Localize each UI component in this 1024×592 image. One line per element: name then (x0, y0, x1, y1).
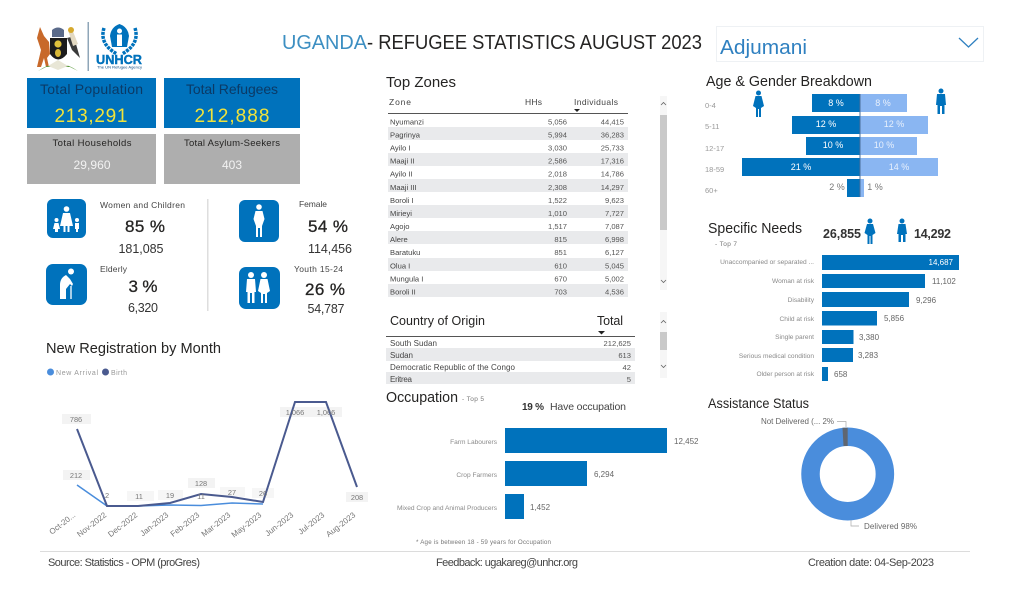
chart: population pyramid: 12 % (884, 119, 904, 129)
line chart: new registration by month: 1,066 (317, 408, 335, 417)
table: country of origin: 42 (623, 363, 631, 372)
line chart: new registration by month: 11 (135, 492, 143, 501)
callout: have occupation: Have occupation (550, 401, 626, 413)
bar chart: specific needs: 14,687 (929, 258, 954, 267)
table: country of origin: Eritrea (390, 375, 413, 384)
table: top zones: Agojo (390, 222, 409, 231)
donut chart: assistance status: Not Delivered (... 2% (761, 417, 834, 426)
stat: Female: 54 % (308, 217, 348, 236)
heading: New Registration by Month: New Registration by Month (46, 340, 221, 357)
donut chart: assistance status: Delivered 98% (864, 522, 917, 531)
card: Total Households (27, 134, 156, 184)
stat: Elderly: 6,320 (128, 301, 158, 315)
divider (207, 199, 208, 311)
table: top zones: 703 (554, 288, 567, 296)
table: top zones: 14,786 (601, 170, 624, 178)
table: top zones: 815 (554, 235, 567, 244)
heading: Specific Needs: - Top 7 (715, 241, 737, 248)
table: top zones: HHs (525, 97, 542, 107)
bar chart: specific needs: Older person at risk (756, 371, 815, 378)
line chart: new registration by month: 212 (70, 471, 82, 480)
stat: Women and Children: 181,085 (118, 242, 164, 256)
bar chart: occupation: Crop Farmers (456, 472, 498, 479)
card: Total Households: Total Households (52, 138, 132, 149)
bar chart: specific needs: 3,380 (859, 333, 880, 342)
table: top zones: 14,297 (601, 183, 624, 192)
donut chart: assistance status (761, 417, 917, 531)
title: - REFUGEE STATISTICS AUGUST 2023 (367, 31, 702, 54)
card: Total Population (27, 78, 156, 128)
chart: population pyramid: 1 % (867, 182, 883, 192)
chart: population pyramid: 60+ (705, 186, 718, 195)
table: top zones: 7,087 (605, 222, 624, 231)
bar chart: occupation: 12,452 (674, 437, 699, 446)
card: Total Households: 29,960 (74, 158, 111, 172)
bar chart: specific needs: Disability (788, 297, 815, 304)
table: top zones: 25,733 (601, 144, 624, 152)
line chart: new registration by month: 27 (228, 488, 236, 497)
line chart: new registration by month: Jul-2023 (297, 510, 327, 536)
title: UGANDA (282, 31, 367, 54)
card: Total Asylum-Seekers: Total Asylum-Seekers (184, 138, 280, 149)
table: country of origin: South Sudan (390, 339, 437, 348)
chart: population pyramid: 21 % (791, 162, 811, 172)
table: top zones: 6,127 (605, 248, 624, 257)
bar chart: specific needs: 658 (834, 370, 848, 379)
stat: Youth 15-24 (239, 264, 345, 316)
table: top zones: Pagrinya (390, 130, 421, 140)
table: top zones: 5,002 (605, 274, 624, 284)
chart: population pyramid: 14 % (889, 162, 909, 172)
footer: source: Source: Statistics - OPM (proGres) (48, 557, 200, 569)
footer: creation date: Creation date: 04-Sep-2023 (808, 557, 934, 569)
table: country of origin: Sudan (390, 351, 413, 360)
heading: Specific Needs (708, 220, 802, 248)
scrollbar: top zones (660, 96, 667, 290)
table: top zones: Mirieyi (390, 209, 412, 218)
stat: specific needs by gender (823, 218, 951, 244)
logo: UNHCR: UNHCR (96, 53, 142, 67)
footer divider (40, 551, 970, 552)
table: top zones: 670 (554, 274, 567, 284)
table: top zones: 44,415 (601, 118, 624, 126)
stat: Women and Children: Women and Children (100, 200, 185, 210)
bar chart: occupation: 1,452 (530, 503, 551, 512)
table: top zones: Mungula I (390, 274, 423, 284)
chart: population pyramid: 8 % (828, 98, 844, 108)
table: country of origin: 5 (627, 375, 631, 384)
line chart: new registration by month: 786 (70, 415, 82, 424)
line chart: new registration by month: Jan-2023 (138, 510, 171, 538)
line chart: new registration by month: Dec-2022 (106, 510, 140, 539)
table: top zones: 1,010 (548, 209, 567, 218)
bar chart: occupation: Mixed Crop and Animal Producers (397, 505, 498, 512)
chart: population pyramid: 10 % (874, 140, 894, 150)
table: top zones: 6,998 (605, 235, 624, 244)
stat: Women and Children: 85 % (125, 217, 165, 236)
stat: Elderly (46, 264, 158, 315)
bar chart: occupation: Farm Labourers (450, 439, 498, 446)
icon: elderly person (46, 264, 87, 305)
table: country of origin: Democratic Republic of the Congo (390, 363, 516, 372)
table: top zones: 4,536 (605, 288, 624, 296)
table: top zones: 17,316 (601, 156, 624, 166)
line chart: new registration by month: 11 (197, 492, 205, 501)
scrollbar: country of origin (660, 312, 667, 378)
table: top zones (388, 97, 628, 297)
chart: population pyramid: 8 % (875, 98, 891, 108)
card: Total Asylum-Seekers (164, 134, 300, 184)
dropdown: Adjumani: Adjumani (720, 36, 807, 59)
table: top zones: Boroli I (390, 196, 414, 205)
table: top zones: 1,522 (548, 196, 567, 205)
chart: population pyramid: 18-59 (705, 165, 724, 174)
logo: UNHCR: The UN Refugee Agency (97, 66, 142, 70)
table: top zones: Individuals (574, 97, 618, 107)
table: top zones: 2,308 (548, 183, 567, 192)
table: top zones: Maaji III (390, 183, 417, 192)
icon: male figure, age chart (936, 88, 946, 114)
table: country of origin: Total (597, 314, 623, 328)
bar chart: specific needs: Unaccompanied or separated ... (720, 259, 814, 266)
logo divider (88, 22, 89, 71)
dropdown: Adjumani (716, 26, 984, 62)
line chart: new registration by month: 2 (105, 491, 109, 500)
stat: Women and Children (47, 199, 185, 256)
heading: Top Zones: Top Zones (386, 74, 456, 91)
line chart: new registration by month: 19 (166, 491, 174, 500)
stat: Youth 15-24: 54,787 (308, 302, 345, 316)
table: top zones: Alere (390, 235, 408, 244)
card: Total Population: 213,291 (54, 106, 128, 127)
stat: Elderly: 3 % (128, 277, 158, 296)
line chart: new registration by month (48, 402, 368, 539)
table: top zones: Ayilo II (390, 170, 413, 178)
heading: Age and Gender Breakdown: Age & Gender Breakdown (706, 73, 872, 90)
table: top zones: Maaji II (390, 156, 414, 166)
stat: Youth 15-24: Youth 15-24 (294, 264, 343, 274)
callout: have occupation: 19 % (522, 402, 544, 413)
heading: Assistance Status: Assistance Status (708, 396, 809, 411)
stat: specific needs by gender: 14,292 (914, 227, 951, 241)
table: top zones: 610 (554, 262, 567, 270)
stat: Female (239, 199, 352, 256)
card: Total Refugees: Total Refugees (186, 81, 278, 97)
chart: population pyramid: 10 % (823, 140, 843, 150)
bar chart: specific needs: 5,856 (884, 314, 905, 323)
icon: woman with children (47, 199, 86, 238)
table: top zones: 5,045 (605, 262, 624, 270)
bar chart: specific needs: 9,296 (916, 296, 937, 305)
line chart: new registration by month: May-2023 (230, 510, 264, 539)
line chart: new registration by month: Oct-20... (48, 510, 77, 536)
table: top zones: 36,283 (601, 130, 624, 140)
line chart: new registration by month: 128 (195, 479, 207, 488)
stat: Elderly: Elderly (100, 264, 128, 274)
stat: Youth 15-24: 26 % (305, 280, 345, 299)
table: top zones: Zone (389, 97, 411, 107)
logo: UNHCR (96, 24, 142, 70)
bar chart: occupation (397, 428, 699, 519)
bar chart: specific needs: Serious medical condition (739, 353, 814, 360)
chart: population pyramid: 5-11 (705, 122, 719, 131)
bar chart: specific needs: 3,283 (858, 351, 879, 360)
table: top zones: Olua I (390, 262, 410, 270)
icon: female (239, 200, 279, 242)
table: country of origin: 613 (618, 351, 631, 360)
table: top zones: Nyumanzi (390, 118, 424, 126)
stat: Female: Female (299, 199, 327, 209)
stat: specific needs by gender: 26,855 (823, 227, 861, 241)
footnote: * Age is between 18 - 59 years for Occupation (416, 539, 552, 546)
table: top zones: 851 (554, 248, 567, 257)
table: top zones: 9,623 (605, 196, 624, 205)
heading: Occupation: - Top 5 (462, 396, 484, 403)
table: top zones: 2,586 (548, 156, 567, 166)
chart: population pyramid (705, 94, 938, 197)
table: top zones: Boroli II (390, 288, 416, 296)
table: top zones: Ayilo I (390, 144, 411, 152)
bar chart: specific needs: Woman at risk (772, 278, 815, 285)
bar chart: specific needs: Child at risk (780, 316, 815, 323)
table: top zones: Baratuku (390, 248, 420, 257)
icon: youth pair (239, 267, 280, 309)
chart: population pyramid: 0-4 (705, 101, 716, 110)
chart legend: Birth (111, 370, 127, 377)
chart: population pyramid: 2 % (829, 182, 845, 192)
line chart: new registration by month: 26 (259, 489, 267, 498)
line chart: new registration by month: Nov-2022 (75, 510, 109, 539)
line chart: new registration by month: Mar-2023 (200, 510, 233, 539)
chart legend: New Arrival (56, 370, 98, 377)
line chart: new registration by month: 1,066 (286, 408, 304, 417)
logo: coat of arms of Uganda (37, 27, 80, 71)
table: country of origin (386, 314, 635, 384)
footer: feedback: Feedback: ugakareg@unhcr.org (436, 557, 578, 569)
table: top zones: 5,994 (548, 130, 567, 140)
line chart: new registration by month: 208 (351, 493, 363, 502)
bar chart: specific needs: Single parent (775, 334, 814, 341)
bar chart: specific needs: 11,102 (932, 277, 956, 286)
chart: population pyramid: 12 % (816, 119, 836, 129)
chart: population pyramid: 12-17 (705, 144, 724, 153)
table: country of origin: Country of Origin (390, 314, 485, 328)
line chart: new registration by month: Jun-2023 (263, 510, 296, 538)
card: Total Population: Total Population (40, 81, 143, 97)
line chart: new registration by month: Feb-2023 (169, 510, 202, 539)
heading: Occupation: Occupation (386, 389, 458, 406)
bar chart: occupation: 6,294 (594, 470, 615, 479)
table: top zones: 2,018 (548, 170, 567, 178)
stat: Female: 114,456 (308, 242, 352, 256)
table: top zones: 7,727 (605, 209, 624, 218)
card: Total Refugees: 212,888 (194, 106, 270, 127)
heading: Specific Needs: Specific Needs (708, 220, 802, 237)
card: Total Refugees (164, 78, 300, 128)
table: top zones: 3,030 (548, 144, 567, 152)
table: top zones: 1,517 (548, 222, 567, 231)
chart legend (47, 368, 127, 377)
card: Total Asylum-Seekers: 403 (222, 158, 242, 172)
table: country of origin: 212,625 (604, 339, 631, 348)
line chart: new registration by month: Aug-2023 (324, 510, 358, 539)
table: top zones: 5,056 (548, 118, 567, 126)
bar chart: specific needs (720, 255, 959, 381)
icon: female figure, age chart (753, 90, 764, 117)
